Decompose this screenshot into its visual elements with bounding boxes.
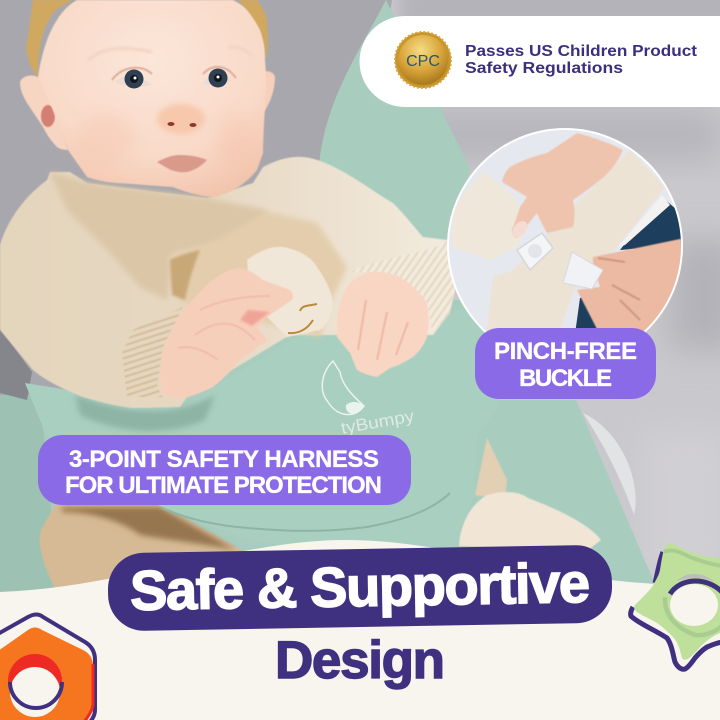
badge text: Passes US Children Product [465,43,698,60]
buckle parts [517,233,603,289]
harness: mint chest strap [25,300,498,550]
icon: gold CPC seal: CPC [406,53,440,70]
icon: gold CPC seal [395,32,451,88]
nose [157,104,205,134]
baby hand left [160,268,293,398]
callout: 3-point safety harness [38,435,411,505]
circular inset: buckle close-up [447,128,683,332]
baby hand right [337,272,428,377]
mouth [157,155,207,172]
callout: pinch-free buckle [475,328,656,399]
legs in knit trousers [40,438,601,600]
ears [20,71,275,150]
knit sweater [0,157,456,408]
white seat clip [583,413,636,515]
star purple outline [631,552,720,669]
headband [26,0,268,77]
badge text: Safety Regulations [465,60,623,77]
upper hand [502,133,623,238]
callout: pinch-free buckle: BUCKLE [519,365,612,392]
icon: orange hexagon teether [0,614,95,720]
badge: CPC compliance pill [360,16,720,107]
callout: 3-point safety harness: FOR ULTIMATE PROTECTION [65,472,382,499]
star green body [634,543,720,660]
callout: 3-point safety harness: 3-POINT SAFETY HARNESS [69,446,379,473]
star darker band [664,550,720,566]
title [107,545,613,690]
left cuff ribbing [122,307,183,397]
side buckle strap [0,328,32,400]
lower hand [577,238,685,335]
title second line: Design [275,631,445,690]
icon: green star teether [631,543,720,669]
cheek blush [75,112,255,168]
face [38,0,266,197]
sweater collar band [50,172,267,300]
harness logo mark [322,361,416,438]
navy background patch [620,201,681,250]
star hole [670,584,718,626]
cream bottom wave [0,540,720,720]
lion patch on sweater [167,212,347,337]
cream sleeve [452,172,523,260]
right cuff ribbing [350,240,455,335]
cream garment [487,150,665,330]
callout: pinch-free buckle: PINCH-FREE [494,338,637,365]
white pill [360,16,720,107]
badge text [465,43,698,77]
eyes [88,47,252,88]
baby head [20,0,275,197]
harness logo mark: tyBumpy [339,406,416,438]
title pill with headline: Safe & Supportive [129,551,590,622]
mint seat fabric [0,0,654,600]
